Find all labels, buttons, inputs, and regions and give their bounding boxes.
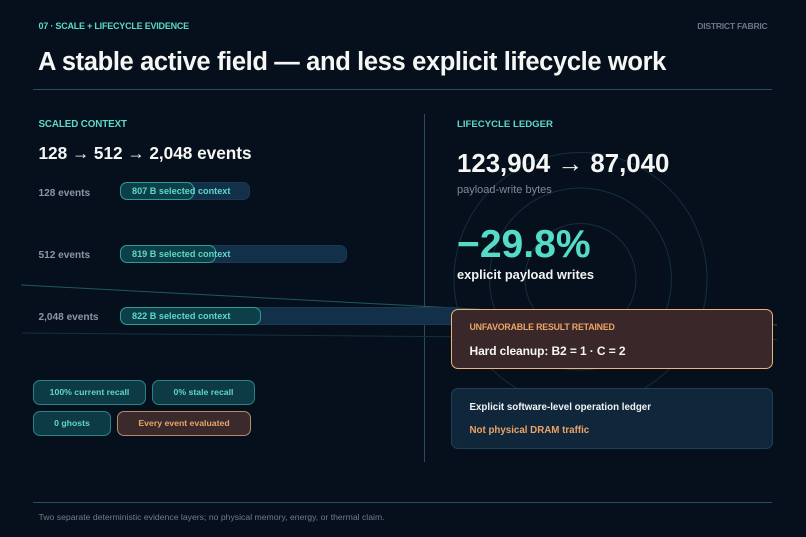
ledger warning: Not physical DRAM traffic [470,424,589,436]
chip: ghosts: 0 ghosts [54,418,90,428]
chip: every event evaluated [117,411,251,436]
bar: 2,048 events [120,307,458,325]
panel: scaled context [38,119,252,323]
callout: operation ledger [451,388,773,449]
ledger note: Explicit software-level operation ledger [470,402,651,412]
bar: 512 events [120,245,347,263]
bar: 128 events [120,182,250,200]
section heading: lifecycle ledger: LIFECYCLE LEDGER [457,119,553,130]
chip: stale recall: 0% stale recall [174,387,233,397]
chip: current recall [33,380,146,405]
section heading: scaled context: SCALED CONTEXT [38,119,127,130]
footer note: Two separate deterministic evidence layers; no physical memory, energy, or thermal claim. [38,512,385,522]
brand label: DISTRICT FABRIC [697,21,768,31]
chip: stale recall [152,380,255,405]
bar: 128 events: 807 B selected context [132,186,230,196]
callout value: Hard cleanup: B2 = 1 · C = 2 [470,344,625,358]
row label: 128 events: 128 events [38,188,90,199]
callout: unfavorable result [451,309,773,369]
bytes headline: 123,904 → 87,040 [457,150,669,178]
bar: 512 events: 819 B selected context [132,249,230,259]
percent caption: explicit payload writes [457,267,594,282]
chip: current recall: 100% current recall [50,387,129,397]
chip: ghosts [33,411,111,436]
bar: 2,048 events: 822 B selected context [132,311,230,321]
chip: every event evaluated: Every event evaluated [138,418,230,428]
row label: 2,048 events: 2,048 events [38,312,99,323]
row label: 512 events: 512 events [38,250,90,261]
callout heading: UNFAVORABLE RESULT RETAINED [470,322,615,332]
eyebrow: 07 · SCALE + LIFECYCLE EVIDENCE [38,21,189,31]
percent reduction: −29.8% [457,223,591,266]
status chips [33,380,255,436]
scale headline: 128 → 512 → 2,048 events [38,143,252,163]
panel: lifecycle ledger [457,119,669,282]
bytes caption: payload-write bytes [457,184,552,196]
title: A stable active field — and less explicit lifecycle work [38,48,666,76]
